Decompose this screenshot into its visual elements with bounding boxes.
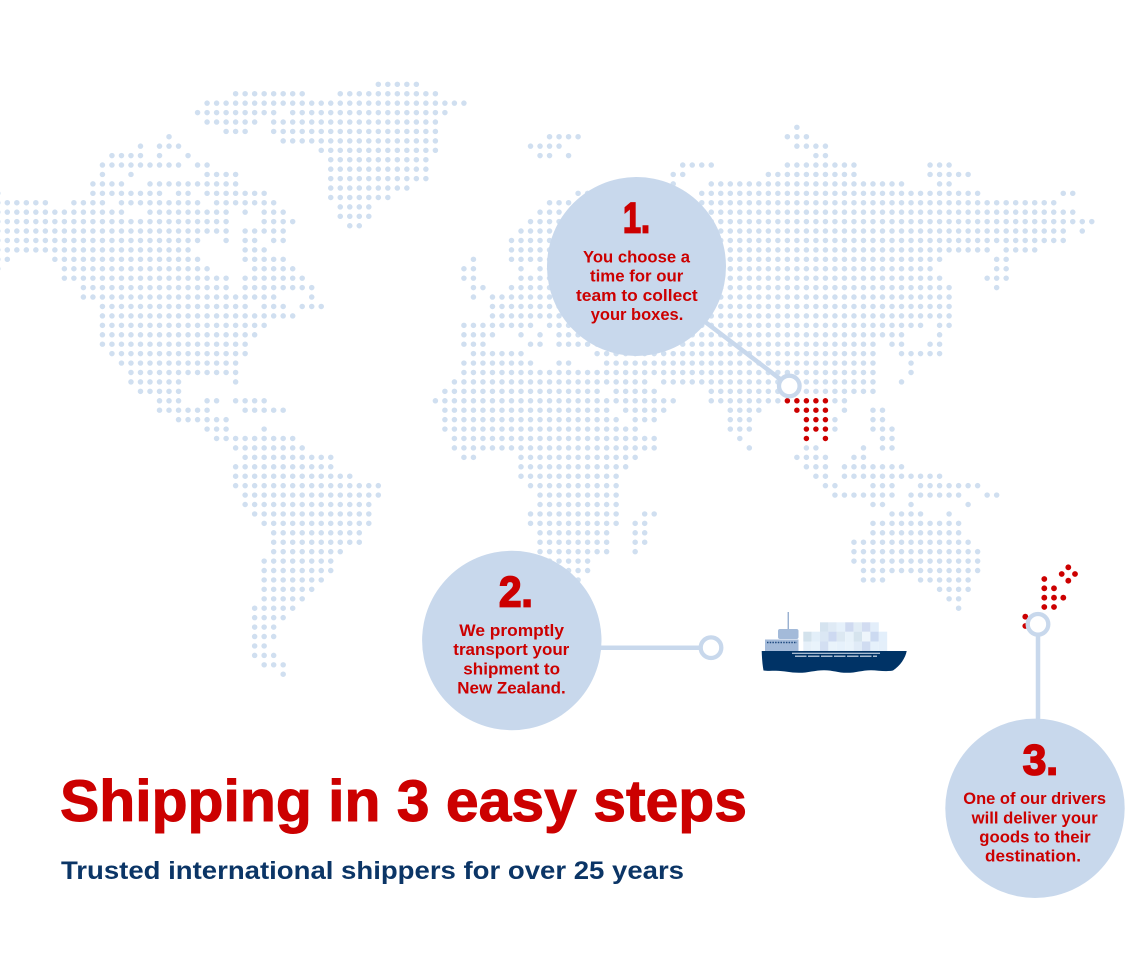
dotted world map <box>0 84 1092 674</box>
step 2 connector and marker <box>595 637 721 658</box>
step 2 text: New Zealand. <box>457 680 566 698</box>
step 3 text <box>963 790 1106 866</box>
hull deck stripes <box>792 653 880 656</box>
step 3 number: 3. <box>1023 736 1058 784</box>
dots: Greenland and Arctic Canada <box>198 84 464 226</box>
dots: continents <box>0 127 1092 674</box>
step 3 text: will deliver your <box>971 809 1098 827</box>
step 2 text: shipment to <box>463 660 560 678</box>
ship hull <box>762 651 907 673</box>
dots: New Zealand in red <box>1022 564 1078 629</box>
subtitle: Trusted international shippers for over 25 years <box>61 857 684 885</box>
step 3 text: goods to their <box>979 829 1091 847</box>
step 3 connector and marker <box>1028 614 1048 725</box>
step 1 connector and marker <box>700 318 800 396</box>
dots: highlighted origin region in red <box>787 401 826 438</box>
step 2 callout <box>422 551 602 730</box>
step 2 text: We promptly <box>459 622 565 640</box>
title: Shipping in 3 easy steps <box>60 769 747 834</box>
step 1 number: 1. <box>623 194 650 242</box>
step 2 text <box>453 622 570 698</box>
step 3 text: destination. <box>985 848 1081 866</box>
step 1 text: You choose a <box>583 248 691 266</box>
step 2 text: transport your <box>453 641 570 659</box>
step 1 text <box>576 248 698 324</box>
icon: container ship <box>762 612 907 673</box>
step 1 text: your boxes. <box>591 306 683 324</box>
step 2 number: 2. <box>499 568 533 616</box>
step 1 callout <box>547 177 726 356</box>
step 3 text: One of our drivers <box>963 790 1106 808</box>
ship containers <box>803 622 887 651</box>
step 1 text: team to collect <box>576 287 698 305</box>
ship mast and superstructure <box>765 612 798 652</box>
step 1 text: time for our <box>590 268 684 286</box>
step 3 callout <box>945 719 1125 898</box>
